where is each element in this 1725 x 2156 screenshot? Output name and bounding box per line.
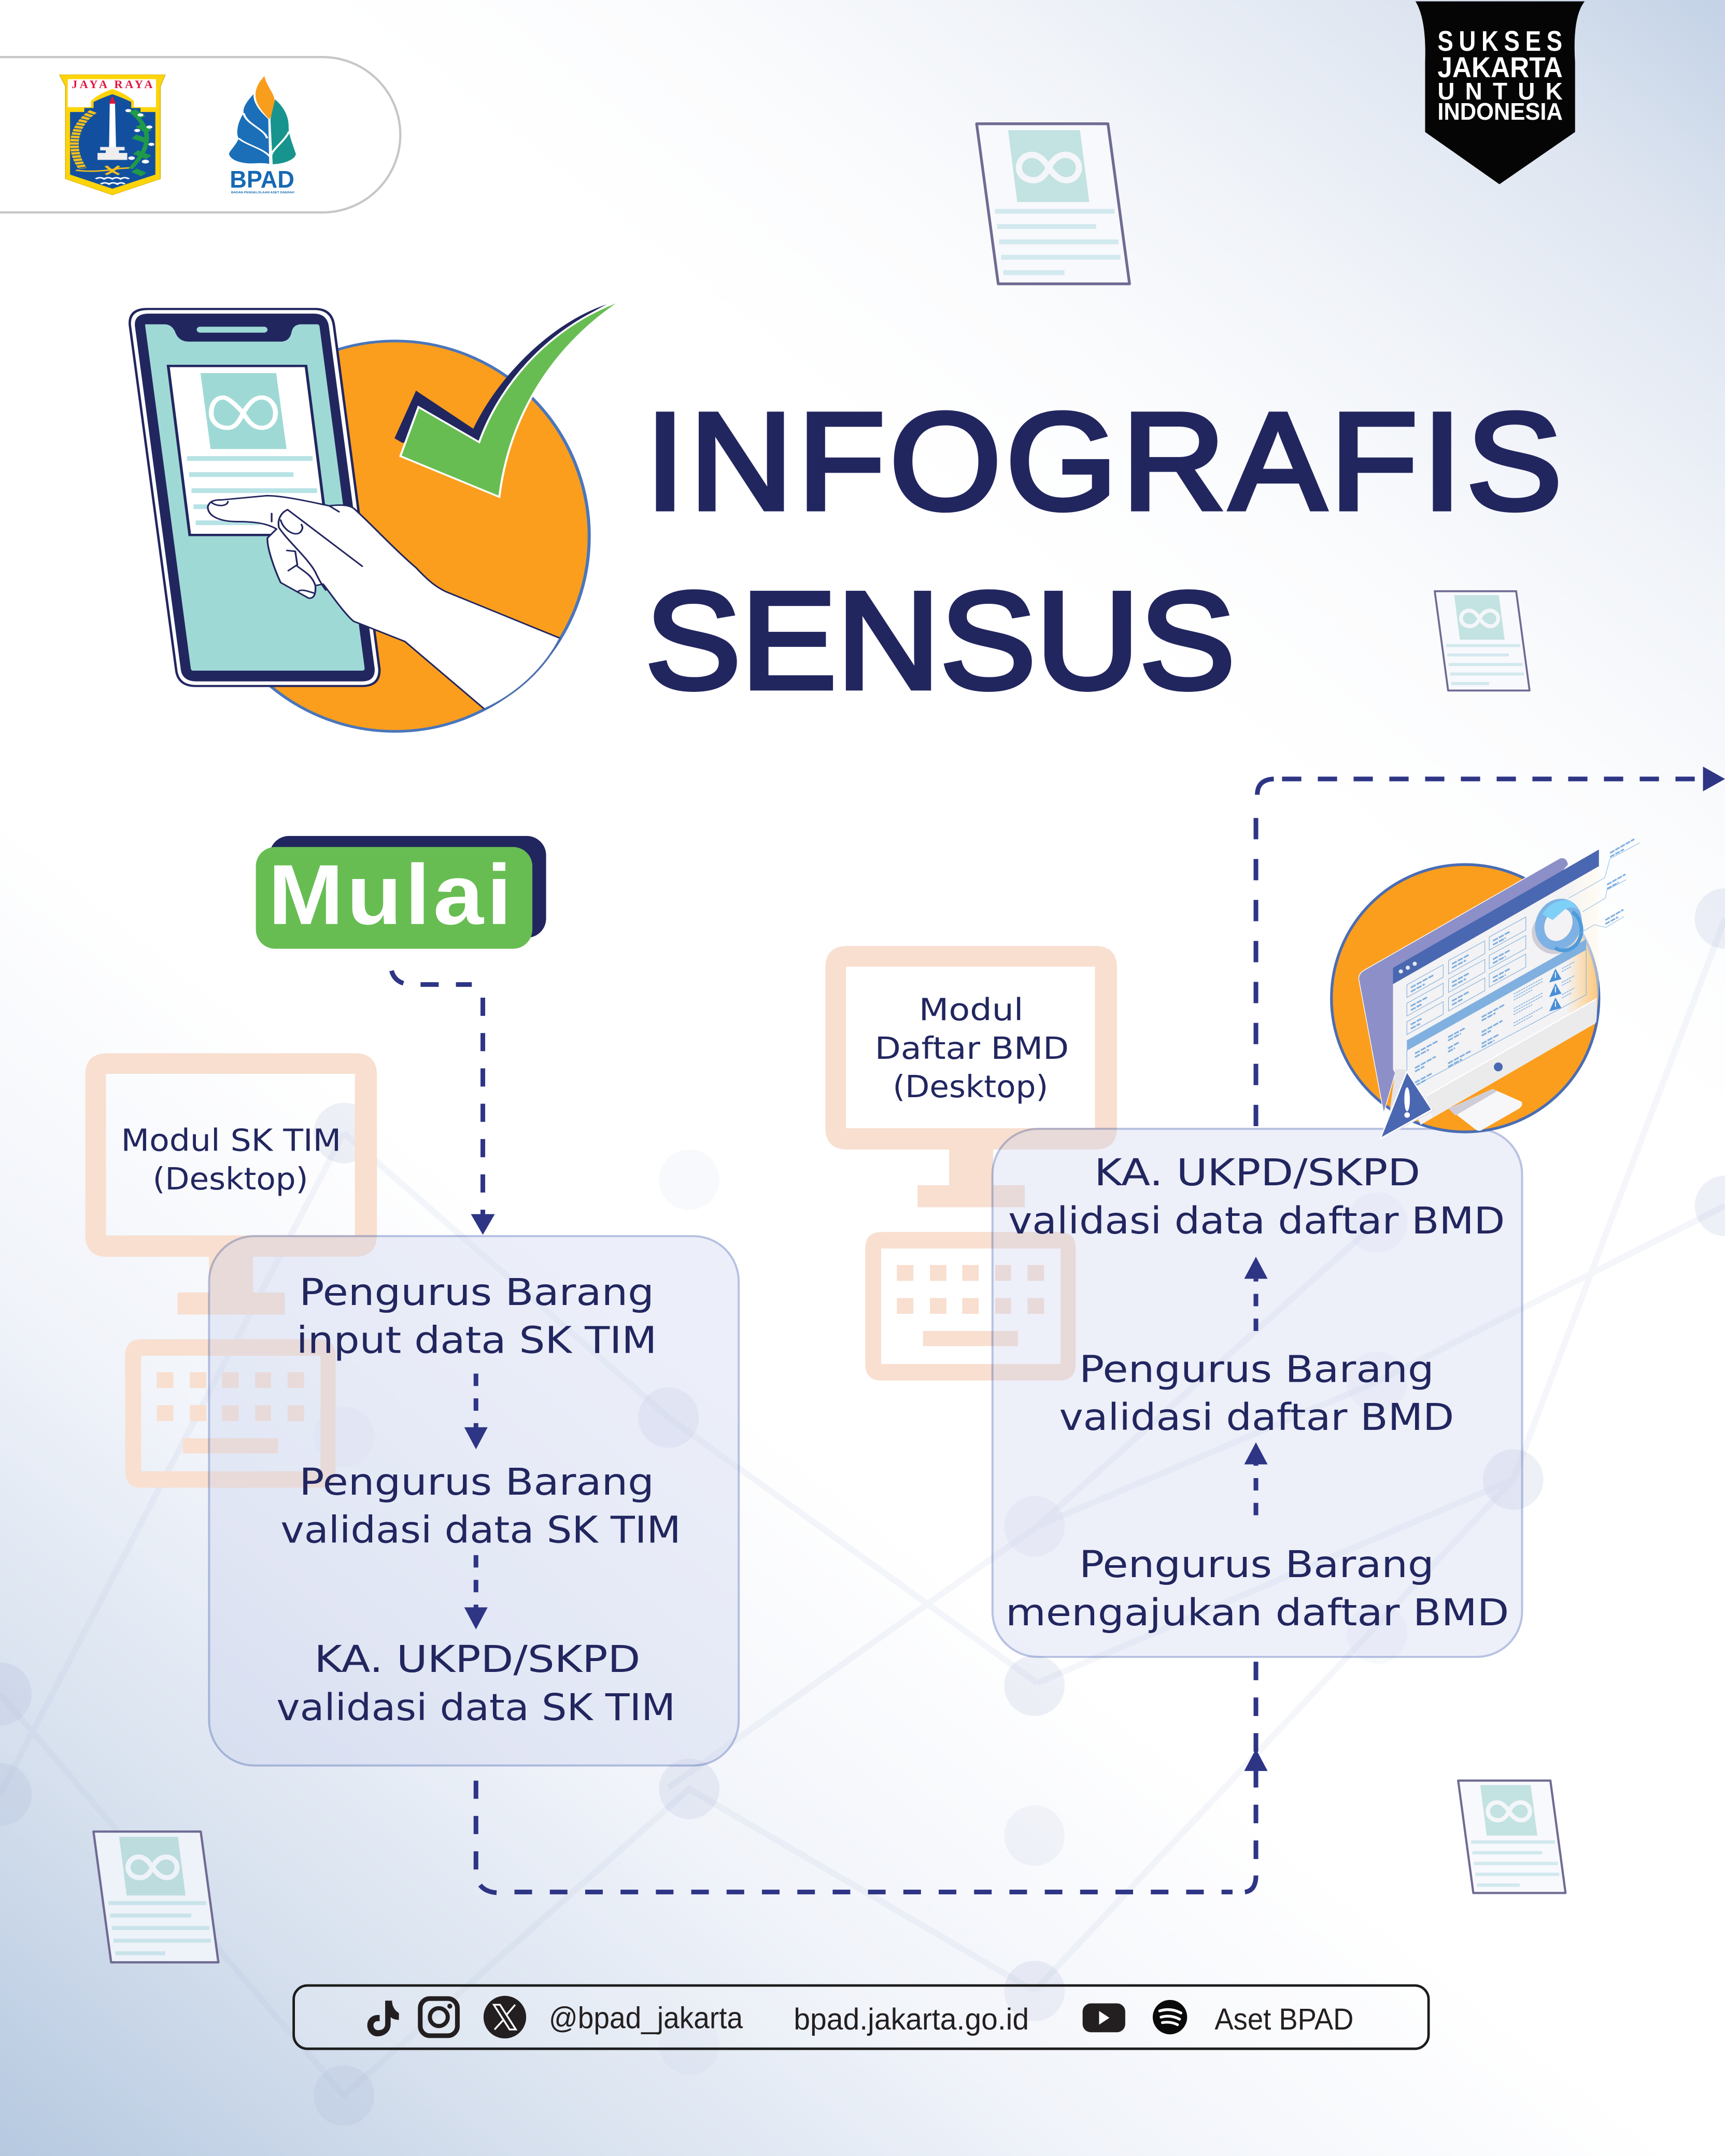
text: Modul Daftar BMD label: Daftar BMD [875, 1031, 1069, 1066]
text: right step 2 [1059, 1348, 1454, 1439]
arrow: right box to exit [1256, 767, 1725, 1126]
panel: left process box [209, 1236, 739, 1766]
panel: right process box [993, 1129, 1522, 1657]
text: Modul SK TIM label: (Desktop) [153, 1161, 308, 1197]
text: left step 2: validasi data SK TIM [280, 1509, 681, 1552]
monitor stand [1449, 1089, 1522, 1131]
text: left step 3 [276, 1638, 675, 1729]
monitor icon: Modul SK TIM [86, 1053, 377, 1488]
badge: Sukses Jakarta untuk Indonesia [1416, 2, 1585, 185]
title: SENSUS [645, 563, 1235, 718]
text: right step 1: mengajukan daftar BMD [1006, 1591, 1509, 1634]
text: Modul Daftar BMD label [875, 992, 1069, 1104]
dashboard cards [1407, 917, 1526, 1034]
monitor back [1359, 858, 1568, 1113]
text: left step 1: input data SK TIM [296, 1319, 657, 1362]
text: right step 2: Pengurus Barang [1079, 1348, 1434, 1391]
icon: Jakarta coat of arms [60, 75, 165, 195]
arrow: right step 1 to 2 [1244, 1442, 1268, 1515]
badge: Sukses Jakarta untuk Indonesia: SUKSES [1437, 25, 1562, 57]
text: right step 3: KA. UKPD/SKPD [1094, 1151, 1420, 1194]
icon: Spotify [1153, 2000, 1187, 2034]
text: social handle: @bpad_jakarta [549, 2001, 743, 2035]
text: left step 1 [296, 1271, 657, 1362]
text: right step 2: validasi daftar BMD [1059, 1396, 1454, 1439]
text: right step 3: validasi data daftar BMD [1008, 1199, 1505, 1242]
icon: X [484, 1996, 526, 2038]
text: Aset BPAD: Aset BPAD [1214, 2003, 1353, 2036]
arrow: left step 1 to 2 [464, 1373, 488, 1449]
text: Modul SK TIM label [121, 1123, 341, 1197]
warning triangle [1380, 1069, 1435, 1139]
text: Modul Daftar BMD label: (Desktop) [893, 1069, 1048, 1104]
keyboard [865, 1232, 1076, 1381]
network pattern [0, 888, 1725, 2126]
document icon: right of title [1435, 591, 1530, 690]
blue band and lower panel [1407, 939, 1586, 1051]
screen [1393, 866, 1599, 1125]
monitor icon: Modul Daftar BMD [825, 946, 1117, 1381]
text: left step 3: validasi data SK TIM [276, 1686, 675, 1729]
illustration: phone, hand and check mark [129, 300, 623, 731]
document icon: top [977, 124, 1129, 284]
text: left step 2 [280, 1460, 681, 1552]
on-screen document [168, 366, 328, 535]
text: website: bpad.jakarta.go.id [794, 2003, 1029, 2036]
text: BPAD: BPAD [230, 166, 294, 193]
orange circle [201, 341, 589, 731]
title: INFOGRAFIS [645, 384, 1562, 538]
text: left step 1: Pengurus Barang [299, 1271, 654, 1314]
text: left step 2: Pengurus Barang [299, 1460, 654, 1503]
text: Modul SK TIM label: Modul SK TIM [121, 1123, 341, 1158]
document icon: lower right [1458, 1781, 1565, 1893]
callout lines [1569, 839, 1639, 937]
title [645, 384, 1562, 718]
arrow: left step 2 to 3 [464, 1555, 488, 1629]
text: left step 3: KA. UKPD/SKPD [314, 1638, 640, 1681]
phone [129, 308, 380, 687]
badge: Sukses Jakarta untuk Indonesia: INDONESIA [1437, 98, 1563, 125]
icon: TikTok [367, 2001, 399, 2036]
arrow: right step 2 to 3 [1244, 1257, 1268, 1331]
icon: YouTube [1083, 2004, 1125, 2032]
document icon: lower left [93, 1832, 218, 1962]
arrow: Mulai to left box [391, 965, 495, 1235]
icon: Instagram [420, 1998, 457, 2036]
button: Mulai: Mulai [268, 847, 512, 942]
text: right step 1 [1006, 1543, 1509, 1634]
footer bar [294, 1985, 1429, 2049]
hand [208, 495, 560, 709]
illustration: desktop dashboard [1332, 839, 1639, 1139]
donut chart [1532, 897, 1584, 954]
small alert triangles [1549, 969, 1561, 1012]
text: right step 1: Pengurus Barang [1079, 1543, 1434, 1586]
logo dot [1494, 1062, 1503, 1071]
icon: BPAD logo [229, 76, 296, 194]
badge: Sukses Jakarta untuk Indonesia: JAKARTA [1437, 51, 1563, 83]
keyboard [125, 1339, 336, 1488]
text: BPAD subtitle: BADAN PENGELOLAAN ASET DAERAH [231, 191, 294, 194]
badge: Sukses Jakarta untuk Indonesia: UNTUK [1437, 78, 1563, 105]
orange circle [1332, 864, 1599, 1132]
arrow: left box to right box [476, 1661, 1268, 1893]
text: Modul Daftar BMD label: Modul [919, 992, 1024, 1028]
text: Jaya Raya: JAYA RAYA [72, 78, 153, 91]
check mark [394, 300, 623, 497]
text: right step 3 [1008, 1151, 1505, 1242]
